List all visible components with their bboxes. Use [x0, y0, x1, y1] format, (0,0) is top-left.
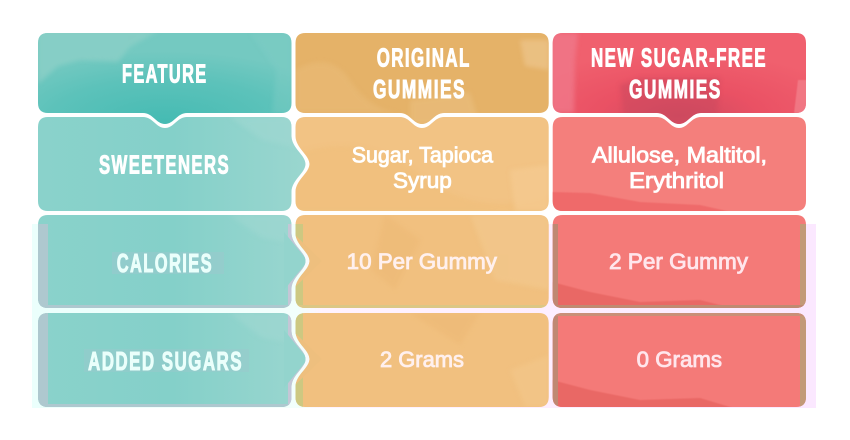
cell: original added sugars: 2 Grams — [380, 347, 464, 372]
header cell: original gummies: ORIGINAL — [377, 43, 471, 73]
cell: new sweeteners: Allulose, Maltitol, — [592, 143, 767, 168]
row label: calories — [38, 215, 308, 308]
cell: original sweeteners — [295, 117, 549, 211]
row label: added sugars — [38, 313, 308, 407]
cell: original calories — [292, 215, 549, 308]
header cell: original gummies — [295, 33, 549, 125]
header cell: feature: FEATURE — [122, 58, 208, 88]
row label: added sugars: ADDED SUGARS — [88, 346, 243, 376]
cell: new calories — [552, 215, 806, 310]
cell: new calories: 2 Per Gummy — [609, 249, 748, 274]
row label: calories: CALORIES — [117, 248, 213, 278]
row label: sweeteners: SWEETENERS — [99, 150, 230, 180]
header cell: new sugar-free gummies: GUMMIES — [629, 74, 722, 104]
cell: new added sugars — [552, 313, 806, 410]
cell: original sweeteners: Sugar, Tapioca — [352, 143, 494, 168]
cell: original calories: 10 Per Gummy — [347, 249, 497, 274]
cell: new sweeteners: Erythritol — [629, 168, 724, 193]
row label: sweeteners — [38, 117, 306, 211]
header cell: original gummies: GUMMIES — [373, 74, 466, 104]
header cell: feature — [38, 30, 292, 125]
cell: original added sugars — [292, 313, 549, 407]
header cell: new sugar-free gummies — [550, 33, 808, 125]
cell: new added sugars: 0 Grams — [637, 347, 722, 372]
cell: new sweeteners — [552, 117, 806, 214]
comparison table infographic — [32, 33, 816, 408]
cell: original sweeteners: Syrup — [393, 168, 452, 193]
